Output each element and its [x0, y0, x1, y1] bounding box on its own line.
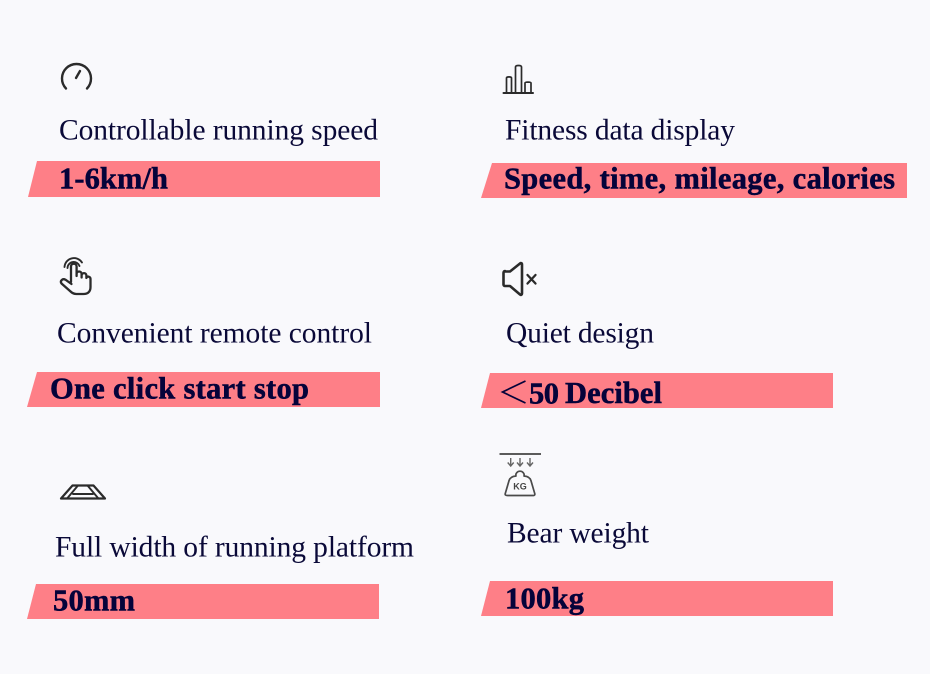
icon: muted speaker [504, 263, 536, 295]
icon: pointing hand [61, 258, 91, 294]
value bar: 100kg: 100kg [505, 582, 584, 616]
value bar: under 50 decibel [481, 373, 833, 410]
panel: fitness data [481, 66, 907, 198]
label: full width of running platform: Full width of running platform [55, 532, 414, 564]
value bar: under 50 decibel: Decibel [565, 376, 662, 410]
value bar: 1-6km/h: 1-6km/h [59, 162, 168, 196]
value bar: under 50 decibel: 50 [529, 376, 559, 410]
icon: weight with arrows [500, 454, 541, 496]
label: bear weight: Bear weight [507, 518, 650, 550]
panel: quiet design [481, 263, 833, 410]
panel: bear weight [481, 454, 833, 616]
icon: bar chart [504, 66, 533, 93]
panel: running platform width [27, 486, 414, 619]
panel: running speed [28, 64, 380, 197]
label: fitness data display: Fitness data display [505, 114, 735, 146]
icon: weight with arrows: KG [513, 482, 527, 492]
label: controllable running speed: Controllable running speed [59, 114, 378, 146]
value bar: 50mm [27, 584, 379, 619]
value bar: speed, time, mileage, calories: Speed, time, mileage, calories [504, 162, 895, 196]
icon: speedometer [62, 64, 91, 88]
value bar: 50mm: 50mm [53, 584, 135, 618]
label: convenient remote control: Convenient remote control [57, 318, 372, 350]
label: quiet design: Quiet design [506, 318, 654, 350]
value bar: 1-6km/h [28, 161, 380, 197]
value bar: 100kg [481, 581, 833, 616]
less-than symbol [502, 381, 526, 403]
icon: running platform [61, 486, 105, 498]
panel: remote control [27, 258, 380, 407]
value bar: one click start stop: One click start stop [50, 372, 309, 406]
